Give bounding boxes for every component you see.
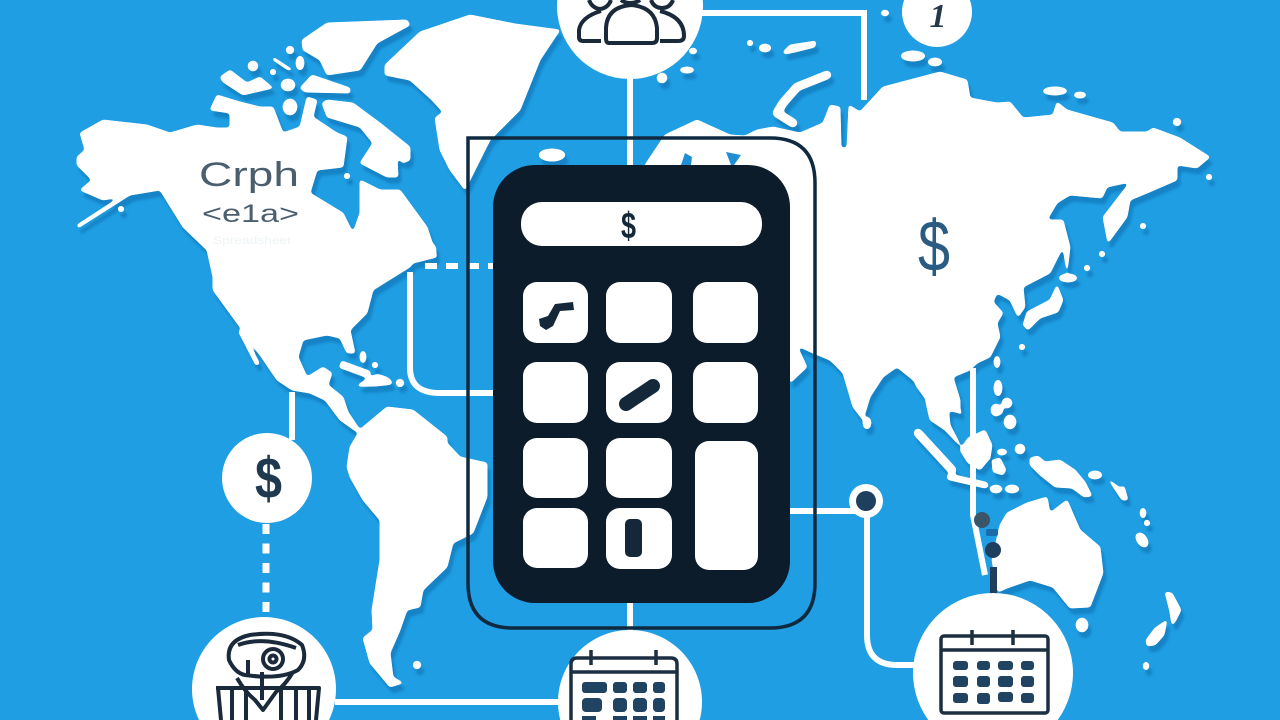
- novaya zemlya: [777, 75, 827, 123]
- connector: calculator to bottom centre: [627, 600, 633, 632]
- calendar outline: [571, 658, 677, 720]
- calendar cells: [582, 682, 665, 720]
- marker tag: [986, 529, 998, 536]
- key glyph: slash: [626, 386, 653, 404]
- continent: australia: [992, 497, 1103, 608]
- connector: dollar node up: [289, 392, 295, 440]
- connector: bottom left to bottom centre: [335, 699, 560, 705]
- icon: calendar: [941, 630, 1048, 713]
- iceland: [539, 149, 565, 161]
- key glyph: squiggle: [539, 302, 574, 330]
- map label: graph text: [199, 156, 299, 247]
- connector: right line through asia: [973, 368, 985, 575]
- connector: top icon to right: [700, 13, 864, 100]
- connector lines: [266, 13, 985, 702]
- key glyph: zero bar: [625, 519, 642, 557]
- node: globe basket icon: [192, 617, 336, 720]
- node: bottom centre calendar: [558, 630, 702, 720]
- node: bottom right calendar: [913, 593, 1073, 720]
- caribbean islands and baja: [240, 330, 404, 387]
- calculator frame outline: [468, 138, 815, 628]
- arctic islands: [118, 20, 436, 257]
- calendar cells: [953, 661, 1034, 704]
- connector: calculator to ring node: [788, 508, 855, 514]
- node circle: [913, 593, 1073, 720]
- node circle: [558, 630, 702, 720]
- dollar sign on asia: $: [918, 207, 950, 287]
- continent: eurasia: [645, 72, 1210, 420]
- calculator: [493, 165, 790, 603]
- continent: north america: [77, 95, 437, 432]
- label line one: Crph: [199, 156, 299, 194]
- node circle: [222, 433, 312, 523]
- faint label line: Spreadsheet: [213, 235, 291, 247]
- node circle: [902, 0, 972, 47]
- label line two: <e1a>: [202, 200, 299, 228]
- marker lower: [985, 542, 1001, 558]
- marker stem: [990, 567, 997, 594]
- keypad buttons: [523, 282, 758, 570]
- node: ring marker: [849, 484, 883, 518]
- node: dollar: [222, 433, 312, 523]
- indochina and malay peninsula: [915, 378, 962, 448]
- node: number one: [902, 0, 972, 47]
- node: people icon: [557, 0, 703, 79]
- connector: calculator to ocean left: [410, 272, 495, 393]
- continent: greenland: [385, 15, 560, 190]
- node circle: [192, 617, 336, 720]
- european coast inlets: [681, 152, 741, 165]
- icon: group of people: [579, 0, 684, 43]
- calculator display: [521, 202, 762, 246]
- australia markers: [974, 512, 1001, 594]
- tasmania and new zealand: [1076, 592, 1181, 670]
- node circle: [557, 0, 703, 79]
- icon: sketched globe: [216, 634, 319, 720]
- africa fragment: [790, 348, 807, 383]
- connector: top icon to calculator: [627, 70, 633, 170]
- dollar symbol: $: [255, 446, 282, 511]
- japan and east asian islands: [863, 223, 1146, 429]
- icon: calendar: [571, 650, 677, 720]
- ring: [849, 484, 883, 518]
- marker upper: [974, 512, 990, 528]
- calendar header rule: [941, 648, 1048, 652]
- connector: dollar node dashed down: [262, 524, 270, 618]
- connector: dashed atlantic: [425, 263, 495, 269]
- northern islands: [657, 10, 1212, 180]
- calendar rings: [972, 630, 1013, 645]
- ring centre: [856, 491, 876, 511]
- connector: ring node to bottom right: [867, 515, 915, 665]
- calendar rings: [591, 650, 656, 665]
- southeast asian islands: [918, 404, 1151, 549]
- continent: south america: [347, 407, 487, 687]
- display dollar symbol: $: [621, 205, 636, 246]
- calendar outline: [941, 636, 1048, 713]
- calculator body: [493, 165, 790, 603]
